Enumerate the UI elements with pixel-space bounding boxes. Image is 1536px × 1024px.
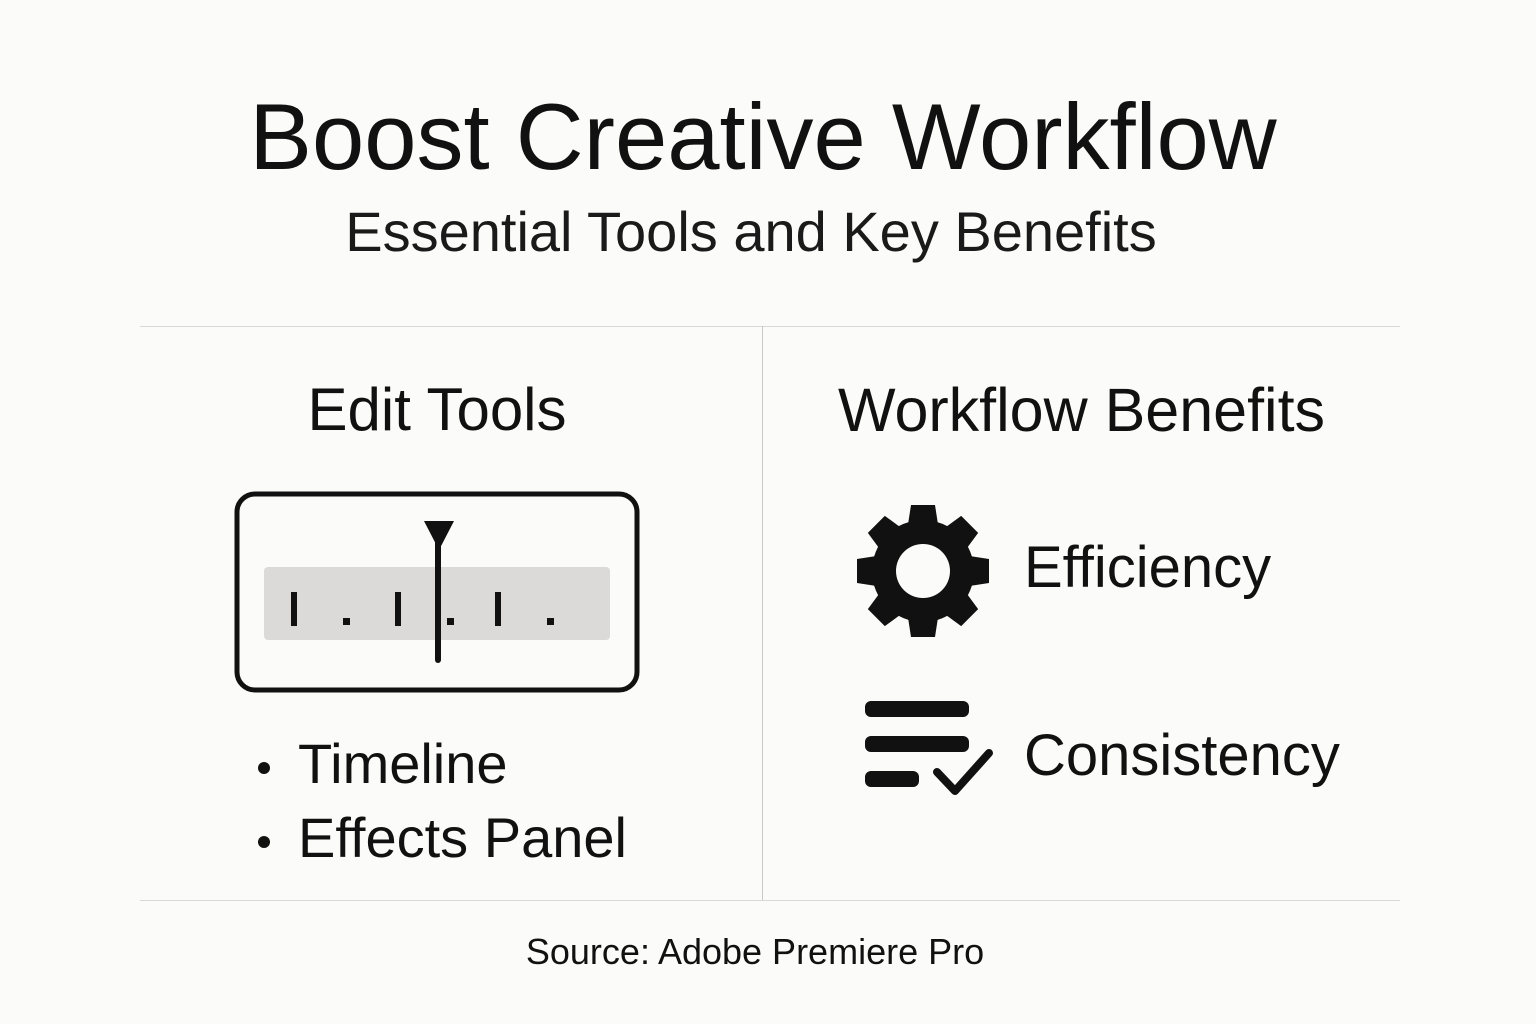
text: Consistency: Consistency: [1024, 723, 1340, 788]
bullet list: Timeline: [298, 732, 508, 795]
panel: edit tools: [234, 376, 640, 869]
source note: Source: Adobe Premiere Pro: [526, 931, 984, 972]
icon: checklist: [865, 701, 993, 795]
icon: timeline: [234, 492, 640, 692]
text: Efficiency: Efficiency: [1024, 535, 1271, 600]
heading: Edit Tools: Edit Tools: [307, 376, 567, 443]
subtitle: Essential Tools and Key Benefits: [345, 200, 1157, 263]
bullet list: [258, 732, 627, 869]
icon: gear: [857, 505, 989, 637]
bullet list: Effects Panel: [298, 806, 627, 869]
heading: Workflow Benefits: Workflow Benefits: [838, 376, 1325, 444]
title: Boost Creative Workflow: [249, 84, 1277, 189]
panel: workflow benefits: [838, 376, 1340, 795]
